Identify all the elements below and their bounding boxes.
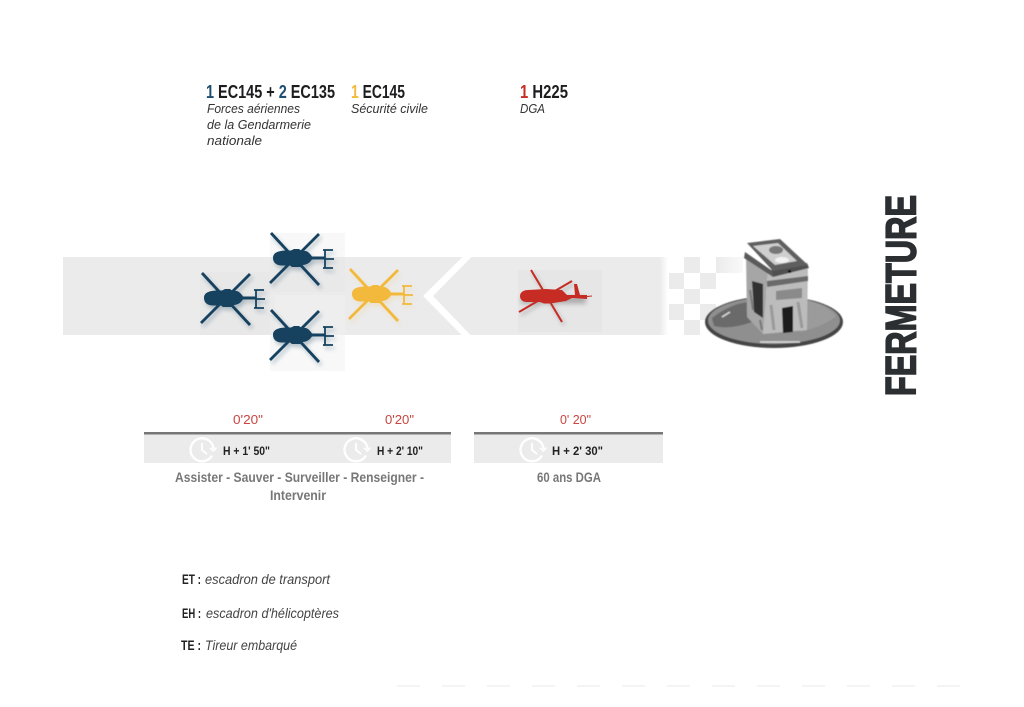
heading: gendarmerie helicopters: Forces aériennes	[207, 101, 300, 116]
checkered finish pattern	[669, 257, 743, 335]
icon: clock 1	[191, 438, 216, 461]
icon: blue helicopter left	[201, 273, 267, 328]
legend: ET :	[182, 571, 201, 587]
caption: mission words: Assister - Sauver - Surveiller - Renseigner -	[175, 469, 424, 485]
vertical title: FERMETURE	[878, 195, 926, 396]
legend	[181, 571, 339, 653]
icon: red helicopter	[519, 270, 592, 325]
arc de triomphe illustration	[705, 239, 843, 348]
caption: mission words: Intervenir	[270, 487, 326, 503]
heading: gendarmerie helicopters: 1 EC145 + 2 EC135	[206, 82, 335, 102]
interval label 2: 0'20"	[385, 412, 414, 427]
heading: gendarmerie helicopters: nationale	[207, 133, 262, 148]
icon: clock 2	[345, 438, 370, 461]
time 1: H + 1' 50"	[223, 444, 270, 458]
icon: blue helicopter top	[270, 233, 336, 288]
legend: Tireur embarqué	[205, 637, 297, 653]
grey flight band	[63, 257, 668, 335]
timeline bar 2	[474, 432, 663, 463]
icon: clock 3	[521, 438, 546, 461]
heading: sécurité civile: Sécurité civile	[351, 101, 428, 116]
icon: blue helicopter bottom	[270, 310, 336, 365]
legend: escadron de transport	[205, 571, 331, 587]
helicopter backdrops	[200, 233, 602, 371]
heading: gendarmerie helicopters: de la Gendarmerie	[207, 117, 311, 132]
heading: DGA: DGA	[520, 101, 545, 116]
time 2: H + 2' 10"	[377, 444, 423, 458]
legend: escadron d'hélicoptères	[206, 605, 339, 621]
timeline bar 1	[144, 432, 451, 463]
heading: sécurité civile: 1 EC145	[351, 82, 405, 102]
heading: DGA: 1 H225	[520, 82, 568, 102]
legend: TE :	[181, 637, 201, 653]
white chevron	[423, 256, 472, 336]
time 3: H + 2' 30"	[552, 444, 603, 458]
interval label 1: 0'20"	[233, 412, 263, 427]
legend: EH :	[182, 605, 201, 621]
caption: mission words	[175, 469, 424, 503]
icon: yellow helicopter	[349, 269, 415, 324]
heading: sécurité civile	[351, 82, 428, 116]
heading: DGA	[520, 82, 568, 116]
caption: 60 ans DGA: 60 ans DGA	[537, 469, 601, 485]
interval label 3: 0' 20"	[560, 412, 591, 427]
heading: gendarmerie helicopters	[206, 82, 335, 148]
